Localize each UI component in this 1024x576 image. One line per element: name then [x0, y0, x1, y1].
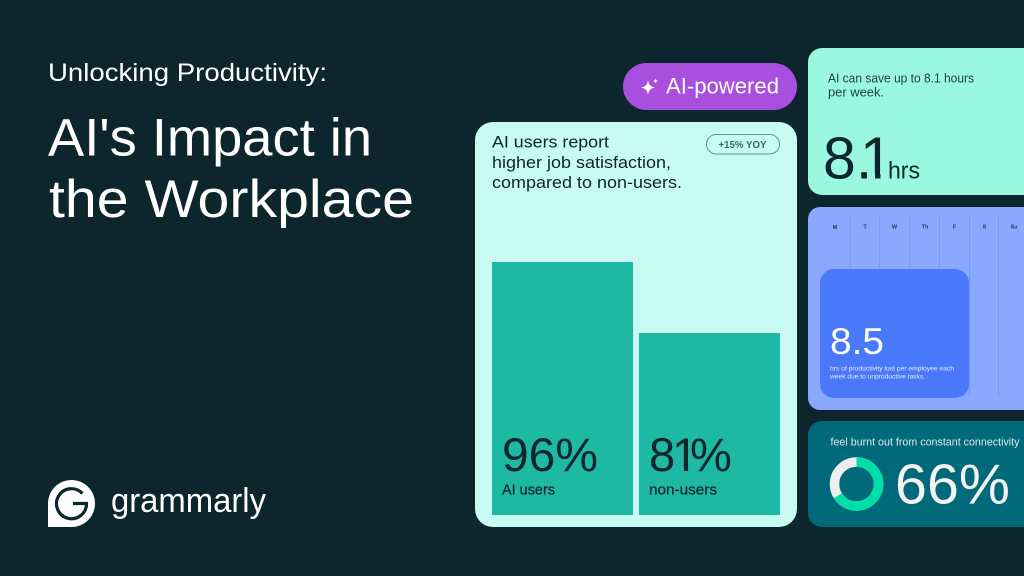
inner card: 8.5 hours [820, 269, 969, 398]
icon: sparkle [641, 78, 658, 94]
title block [48, 59, 414, 229]
donut chart: 66% [834, 462, 878, 506]
calendar weekday labels: F [953, 224, 957, 230]
panel text: per week. [828, 86, 884, 100]
tag: +15% YOY: +15% YOY [718, 139, 766, 151]
panel text: feel burnt out from constant connectivity [830, 437, 1020, 449]
tag: +15% YOY [706, 134, 780, 154]
inner card: 8.5 hours: 8.5 [830, 321, 884, 362]
panel heading: higher job satisfaction, [492, 153, 671, 172]
main heading: AI's Impact in [48, 108, 372, 168]
badge: AI-powered: AI-powered [666, 74, 779, 98]
wordmark: grammarly [111, 482, 266, 520]
main heading [48, 108, 414, 229]
calendar weekday labels: W [892, 224, 898, 230]
logo: grammarly [48, 480, 266, 527]
inner card: 8.5 hours: hrs of productivity lost per employee each [830, 366, 955, 372]
bar: non-users: 81 [649, 428, 698, 481]
panel text: AI can save up to 8.1 hours [828, 71, 974, 85]
panel: burnout [808, 421, 1024, 527]
panel heading: AI users report [492, 132, 609, 152]
panel: job satisfaction [475, 122, 797, 527]
stat: 8.1 hrs: hrs [888, 158, 920, 184]
bar: non-users: % [690, 428, 732, 481]
main heading: the Workplace [49, 170, 414, 229]
calendar weekday labels: S [983, 224, 987, 230]
panel heading [492, 132, 682, 192]
calendar weekday labels: Th [922, 224, 929, 230]
bar: non-users: non-users [649, 482, 717, 498]
stat: 8.1 hrs [823, 126, 920, 192]
bar: AI users: AI users [502, 482, 555, 498]
bar: non-users [639, 333, 780, 515]
icon: G speech bubble [48, 480, 95, 527]
calendar weekday labels [833, 224, 1018, 231]
inner card: 8.5 hours: week due to unproductive tasks. [829, 374, 925, 380]
stat: 8.1 hrs: 1 [860, 126, 893, 192]
panel: hours saved [808, 48, 1024, 195]
stat: 66%: 66% [895, 452, 1010, 516]
calendar weekday labels: Su [1010, 224, 1018, 230]
calendar weekday labels: M [833, 225, 838, 231]
bar: AI users [492, 262, 633, 515]
bar: AI users: 96% [502, 428, 598, 481]
badge: AI-powered [623, 63, 797, 110]
subtitle: Unlocking Productivity: [48, 59, 327, 87]
calendar weekday labels: T [863, 224, 867, 230]
panel text [828, 71, 974, 100]
panel: productivity lost calendar [808, 207, 1024, 410]
stat: 8.1 hrs: 8. [823, 126, 872, 192]
panel heading: compared to non-users. [492, 173, 682, 192]
